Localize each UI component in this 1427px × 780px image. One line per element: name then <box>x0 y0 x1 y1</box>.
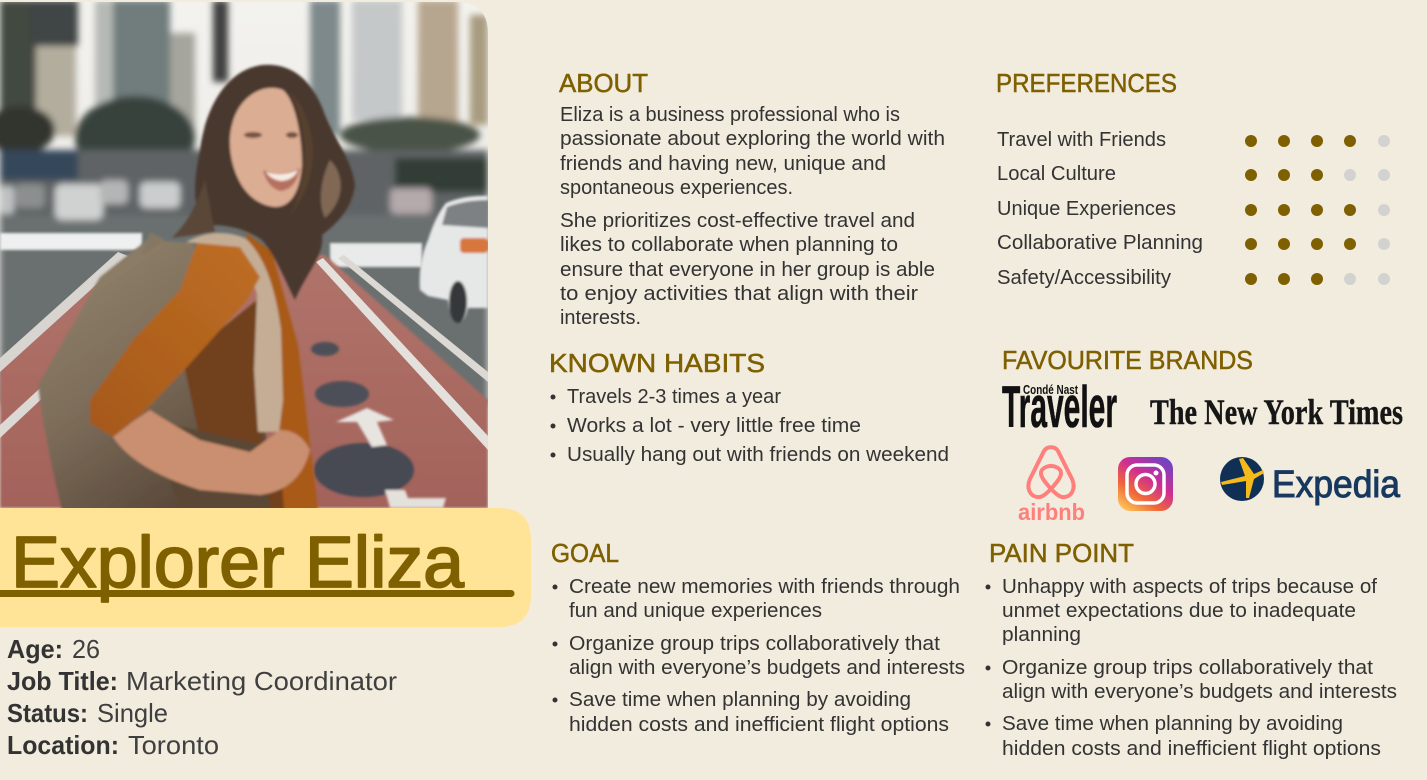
woman <box>38 65 355 510</box>
demographic details: Toronto <box>128 730 219 760</box>
pedestrian crossing stripes <box>0 233 422 267</box>
panel: goal: GOAL <box>551 538 619 568</box>
arm and hand <box>113 410 310 495</box>
photo: woman with backpack on city street <box>0 0 488 510</box>
panel: pain point: align with everyone’s budgets and interests <box>1002 681 1397 703</box>
torso <box>184 300 286 508</box>
panel: goal <box>551 538 965 736</box>
panel: goal: Organize group trips collaboratively that <box>569 633 940 655</box>
panel: known habits: Works a lot - very little free time <box>567 415 861 437</box>
panel: pain point: PAIN POINT <box>989 538 1134 568</box>
logo: Condé Nast Traveler <box>1002 375 1117 440</box>
road manholes and arrow <box>311 342 446 508</box>
logo: Expedia <box>1220 457 1401 506</box>
demographic details <box>7 634 397 760</box>
hair <box>195 65 355 300</box>
logo: Airbnb: airbnb <box>1018 499 1085 525</box>
logo: Instagram <box>1118 457 1173 511</box>
logo: Expedia: Expedia <box>1272 464 1401 506</box>
cycle lane <box>0 255 488 508</box>
demographic details: Age: <box>7 634 63 664</box>
backpack <box>38 240 270 510</box>
logo: Condé Nast Traveler: Condé Nast <box>1023 382 1079 397</box>
panel: known habits: Travels 2-3 times a year <box>567 386 781 408</box>
panel: preferences <box>996 68 1390 289</box>
panel: pain point: hidden costs and inefficient flight options <box>1002 738 1381 760</box>
persona name: Explorer Eliza <box>11 523 465 603</box>
panel: preferences: PREFERENCES <box>996 68 1177 98</box>
panel: pain point: Organize group trips collaboratively that <box>1002 657 1373 679</box>
panel: about <box>559 68 945 329</box>
panel: favourite brands: FAVOURITE BRANDS <box>1002 345 1253 375</box>
shoulder strap <box>186 233 283 432</box>
panel: goal: fun and unique experiences <box>569 600 822 622</box>
panel: about: passionate about exploring the world with <box>560 128 945 150</box>
panel: known habits <box>549 348 949 466</box>
panel: goal: align with everyone’s budgets and interests <box>569 657 965 679</box>
panel: about: ensure that everyone in her group is able <box>560 259 935 281</box>
panel: pain point: unmet expectations due to inadequate <box>1002 600 1356 622</box>
panel: pain point: Unhappy with aspects of trips because of <box>1002 576 1377 598</box>
panel: preferences: Collaborative Planning <box>997 232 1203 254</box>
panel: about: to enjoy activities that align with their <box>560 283 918 305</box>
demographic details: Single <box>97 698 168 728</box>
panel: pain point <box>986 538 1397 760</box>
panel: pain point: planning <box>1002 624 1081 646</box>
sleeve <box>90 243 260 437</box>
white car <box>420 196 488 323</box>
panel: about: likes to collaborate when planning to <box>560 234 898 256</box>
city background <box>0 0 488 405</box>
panel: about: interests. <box>560 307 641 329</box>
panel: preferences: Local Culture <box>997 163 1116 185</box>
demographic details: Status: <box>7 698 88 728</box>
panel: about: spontaneous experiences. <box>560 177 793 199</box>
panel: known habits: KNOWN HABITS <box>549 348 765 378</box>
panel: goal: hidden costs and inefficient flight options <box>569 714 949 736</box>
panel: preferences: Unique Experiences <box>997 198 1176 220</box>
panel: known habits: Usually hang out with friends on weekend <box>567 444 949 466</box>
demographic details: Marketing Coordinator <box>126 666 397 696</box>
panel: about: Eliza is a business professional who is <box>560 104 900 126</box>
demographic details: Location: <box>7 730 119 760</box>
panel: about: She prioritizes cost-effective travel and <box>560 210 915 232</box>
logo: Condé Nast Traveler: Traveler <box>1002 375 1117 440</box>
name banner <box>0 508 531 627</box>
demographic details: 26 <box>72 634 100 664</box>
logo: Airbnb <box>1018 447 1085 525</box>
scarf <box>245 232 318 510</box>
panel: about: friends and having new, unique and <box>560 153 886 175</box>
panel: goal: Save time when planning by avoiding <box>569 689 911 711</box>
panel: goal: Create new memories with friends through <box>569 576 960 598</box>
face <box>230 88 302 207</box>
preference rating dots <box>1245 135 1390 285</box>
panel: pain point: Save time when planning by avoiding <box>1002 713 1343 735</box>
demographic details: Job Title: <box>7 666 118 696</box>
panel: preferences: Safety/Accessibility <box>997 267 1171 289</box>
panel: preferences: Travel with Friends <box>997 129 1166 151</box>
panel: about: ABOUT <box>559 68 648 98</box>
panel: favourite brands <box>1002 345 1403 525</box>
